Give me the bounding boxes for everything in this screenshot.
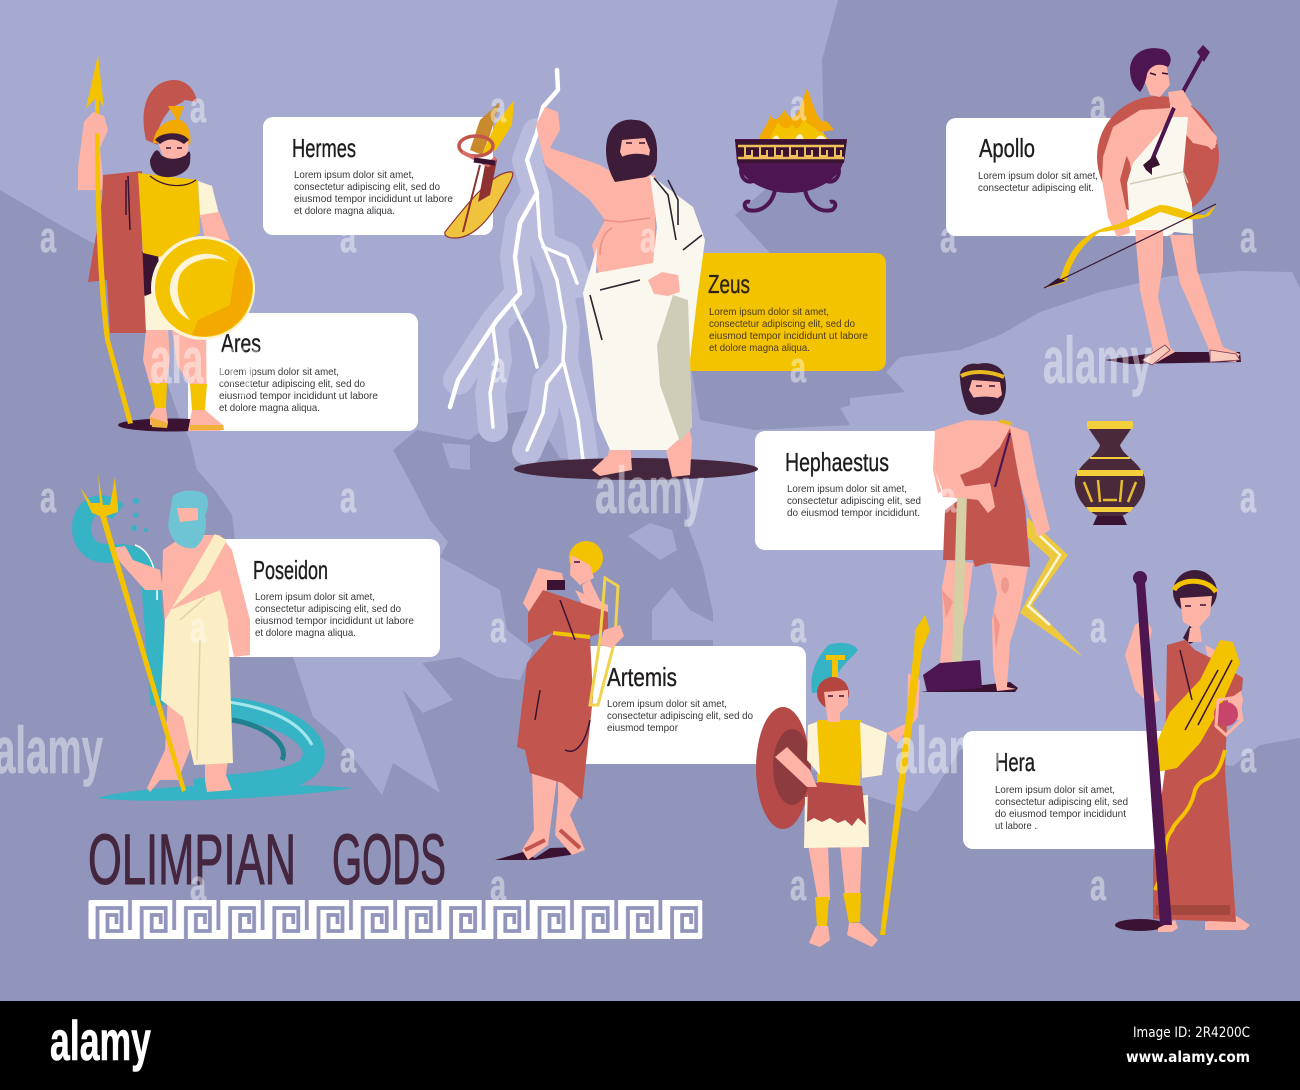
footer bar: www.alamy.com bbox=[1126, 1048, 1250, 1066]
figure: Apollo bbox=[1044, 45, 1241, 365]
card: Poseidon: consectetur adipiscing elit, sed do bbox=[255, 603, 401, 615]
footer bar: alamy bbox=[50, 1009, 151, 1072]
card: Apollo: Lorem ipsum dolor sit amet, bbox=[978, 170, 1098, 182]
watermarks: a bbox=[340, 213, 356, 262]
card: Poseidon: Poseidon bbox=[253, 555, 328, 585]
card: Ares: eiusmod tempor incididunt ut labore bbox=[219, 390, 378, 402]
icon: Greek vase bbox=[1075, 421, 1145, 525]
watermarks bbox=[0, 81, 1256, 910]
watermarks: alamy bbox=[895, 713, 1004, 787]
card: Ares: Ares bbox=[221, 328, 261, 358]
card: Poseidon: Lorem ipsum dolor sit amet, bbox=[255, 591, 375, 603]
card: Zeus: Zeus bbox=[708, 269, 750, 299]
card: Hera: do eiusmod tempor incididunt bbox=[995, 808, 1126, 820]
card: Hera bbox=[963, 731, 1193, 849]
watermarks: alamy bbox=[595, 453, 704, 527]
card: Hera: ut labore . bbox=[995, 820, 1037, 832]
watermarks: a bbox=[790, 603, 806, 652]
watermarks: a bbox=[790, 861, 806, 910]
card: Zeus: consectetur adipiscing elit, sed do bbox=[709, 318, 855, 330]
card: Hermes bbox=[263, 117, 493, 235]
watermarks: alamy bbox=[150, 323, 259, 397]
figure: Athena bbox=[756, 615, 930, 947]
watermarks: a bbox=[340, 733, 356, 782]
figure: Hephaestus bbox=[920, 363, 1083, 692]
watermarks: a bbox=[490, 343, 506, 392]
card: Artemis bbox=[576, 646, 806, 764]
card: Hermes: Lorem ipsum dolor sit amet, bbox=[294, 169, 414, 181]
icon: flaming brazier bbox=[735, 88, 847, 211]
card: Zeus bbox=[660, 253, 886, 371]
lightning bolt bbox=[450, 70, 583, 460]
card: Hermes: consectetur adipiscing elit, sed do bbox=[294, 181, 440, 193]
footer bar bbox=[0, 1001, 1300, 1090]
watermarks: a bbox=[790, 343, 806, 392]
watermarks: a bbox=[940, 473, 956, 522]
card: Hera: Lorem ipsum dolor sit amet, bbox=[995, 784, 1115, 796]
watermarks: a bbox=[40, 213, 56, 262]
figure: Hera bbox=[1115, 570, 1250, 932]
card: Hermes: eiusmod tempor incididunt ut labore bbox=[294, 193, 453, 205]
card: Hera: Hera bbox=[995, 747, 1035, 777]
title: OLIMPIAN bbox=[88, 821, 296, 900]
card: Artemis: Lorem ipsum dolor sit amet, bbox=[607, 698, 727, 710]
card: Artemis: eiusmod tempor bbox=[607, 722, 678, 734]
card: Artemis: Artemis bbox=[607, 662, 677, 692]
watermarks: a bbox=[490, 861, 506, 910]
card: Hephaestus: consectetur adipiscing elit, sed bbox=[787, 495, 921, 507]
card: Apollo: Apollo bbox=[979, 133, 1035, 163]
figure: Zeus bbox=[450, 70, 758, 480]
card: Ares: consectetur adipiscing elit, sed do bbox=[219, 378, 365, 390]
card: Poseidon: et dolore magna aliqua. bbox=[255, 627, 356, 639]
figure: Ares bbox=[78, 55, 255, 432]
watermarks: a bbox=[190, 603, 206, 652]
card: Artemis: consectetur adipiscing elit, sed do bbox=[607, 710, 753, 722]
footer bar: Image ID: 2R4200C bbox=[1133, 1025, 1250, 1041]
watermarks: a bbox=[1090, 861, 1106, 910]
icon: winged sandal bbox=[445, 100, 514, 238]
card: Hermes: et dolore magna aliqua. bbox=[294, 205, 395, 217]
watermarks: a bbox=[640, 213, 656, 262]
card: Hera: consectetur adipiscing elit, sed bbox=[995, 796, 1128, 808]
card: Poseidon bbox=[210, 539, 440, 657]
card: Hephaestus: Lorem ipsum dolor sit amet, bbox=[787, 483, 907, 495]
card: Hephaestus: do eiusmod tempor incididunt. bbox=[787, 507, 920, 519]
watermarks: a bbox=[40, 473, 56, 522]
card: Ares: Lorem ipsum dolor sit amet, bbox=[219, 366, 339, 378]
card: Poseidon: eiusmod tempor incididunt ut labore bbox=[255, 615, 414, 627]
card: Hephaestus bbox=[755, 431, 985, 550]
watermarks: a bbox=[190, 861, 206, 910]
card: Zeus: et dolore magna aliqua. bbox=[709, 342, 810, 354]
title: GODS bbox=[332, 821, 446, 900]
figure: Poseidon bbox=[80, 473, 353, 801]
watermarks: a bbox=[190, 83, 206, 132]
greek key border bbox=[88, 900, 702, 939]
card: Ares bbox=[188, 313, 418, 431]
card: Zeus: eiusmod tempor incididunt ut labore bbox=[709, 330, 868, 342]
watermarks: a bbox=[1090, 81, 1106, 130]
watermarks: a bbox=[1240, 473, 1256, 522]
card: Ares: et dolore magna aliqua. bbox=[219, 402, 320, 414]
watermarks: a bbox=[1240, 733, 1256, 782]
watermarks: a bbox=[1090, 603, 1106, 652]
card: Hermes: Hermes bbox=[292, 133, 356, 163]
card: Apollo bbox=[946, 118, 1176, 236]
card: Hephaestus: Hephaestus bbox=[785, 447, 889, 477]
watermarks: a bbox=[940, 213, 956, 262]
watermarks: alamy bbox=[1043, 323, 1152, 397]
figure: Artemis bbox=[495, 541, 624, 860]
watermarks: a bbox=[340, 473, 356, 522]
watermarks: a bbox=[1240, 213, 1256, 262]
watermarks: a bbox=[490, 603, 506, 652]
watermarks: a bbox=[790, 81, 806, 130]
card: Apollo: consectetur adipiscing elit. bbox=[978, 182, 1094, 194]
card: Zeus: Lorem ipsum dolor sit amet, bbox=[709, 306, 829, 318]
watermarks: a bbox=[490, 83, 506, 132]
